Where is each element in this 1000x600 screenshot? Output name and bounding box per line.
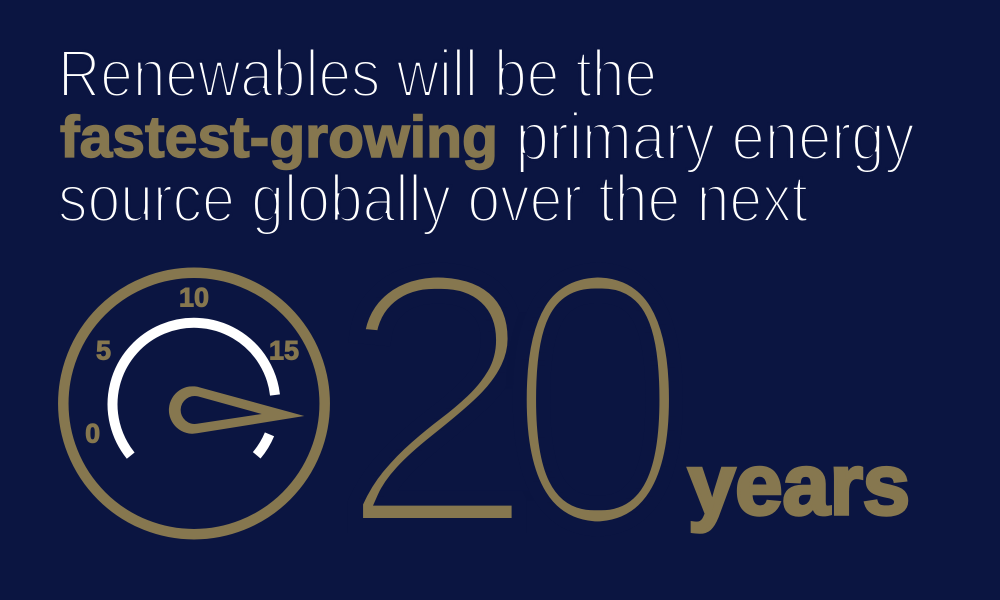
years label: years <box>688 437 910 533</box>
gauge white arc <box>113 323 275 456</box>
title line 2: continuation: primary energy <box>516 100 915 174</box>
gauge label 5: 5 <box>96 336 111 366</box>
title line 3: source globally over the next <box>58 162 808 236</box>
icon: speedometer gauge <box>63 273 325 534</box>
title line 1: Renewables will be the <box>58 36 657 112</box>
gauge outer ring <box>63 273 325 534</box>
digit 0: 0 <box>503 196 693 600</box>
gauge white arc end segment <box>257 434 270 455</box>
gauge label 0: 0 <box>85 418 100 448</box>
title line 2: highlighted phrase: fastest-growing <box>60 105 498 170</box>
gauge label 15: 15 <box>269 336 299 366</box>
digit 2: 2 <box>333 195 542 600</box>
gauge label 10: 10 <box>179 282 209 312</box>
title <box>58 36 915 236</box>
big number 20 <box>333 195 693 600</box>
gauge needle <box>169 386 304 434</box>
